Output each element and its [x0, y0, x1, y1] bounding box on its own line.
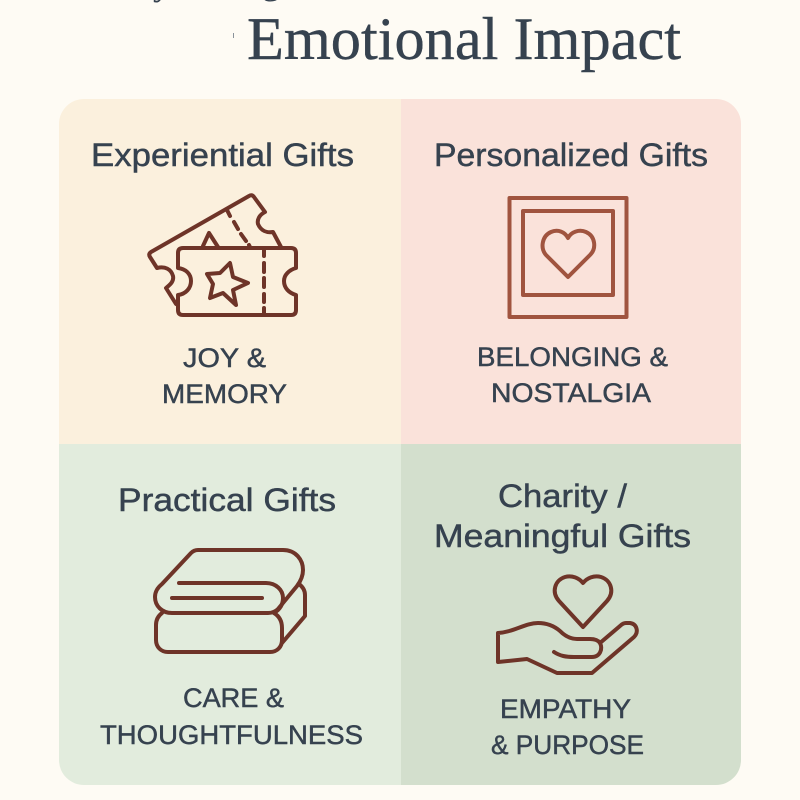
quadrant grid: [59, 99, 741, 785]
label: joy and memory: JOY &: [183, 343, 266, 373]
panel: charity and meaningful gifts: [401, 444, 741, 785]
panel: experiential gifts: [59, 99, 401, 444]
label: belonging and nostalgia: BELONGING &: [477, 342, 668, 372]
heading: charity and meaningful gifts: [434, 478, 691, 554]
icon: hand holding heart: [498, 576, 637, 673]
icon: folded blanket: [155, 550, 305, 652]
label: joy and memory: MEMORY: [162, 379, 287, 409]
title: Emotional Impact: [247, 6, 681, 72]
heading: practical gifts: Practical Gifts: [118, 482, 336, 518]
label: empathy and purpose: [492, 699, 644, 754]
icon: tickets: [149, 195, 296, 315]
label: belonging and nostalgia: [479, 347, 668, 402]
panel: practical gifts: [59, 444, 401, 785]
panel: personalized gifts: [401, 99, 741, 444]
label: belonging and nostalgia: NOSTALGIA: [491, 378, 651, 408]
label: care and thoughtfulness: THOUGHTFULNESS: [100, 720, 363, 750]
label: care and thoughtfulness: CARE &: [183, 683, 284, 713]
heading: personalized gifts: Personalized Gifts: [434, 137, 708, 173]
icon: photo frame with heart: [510, 198, 626, 317]
label: joy and memory: [164, 348, 287, 404]
label: empathy and purpose: & PURPOSE: [491, 730, 644, 760]
heading: charity and meaningful gifts: Charity /: [498, 478, 627, 514]
label: care and thoughtfulness: [100, 688, 362, 744]
heading: charity and meaningful gifts: Meaningful Gifts: [434, 518, 691, 554]
heading: experiential gifts: Experiential Gifts: [91, 137, 354, 173]
label: empathy and purpose: EMPATHY: [500, 694, 631, 724]
